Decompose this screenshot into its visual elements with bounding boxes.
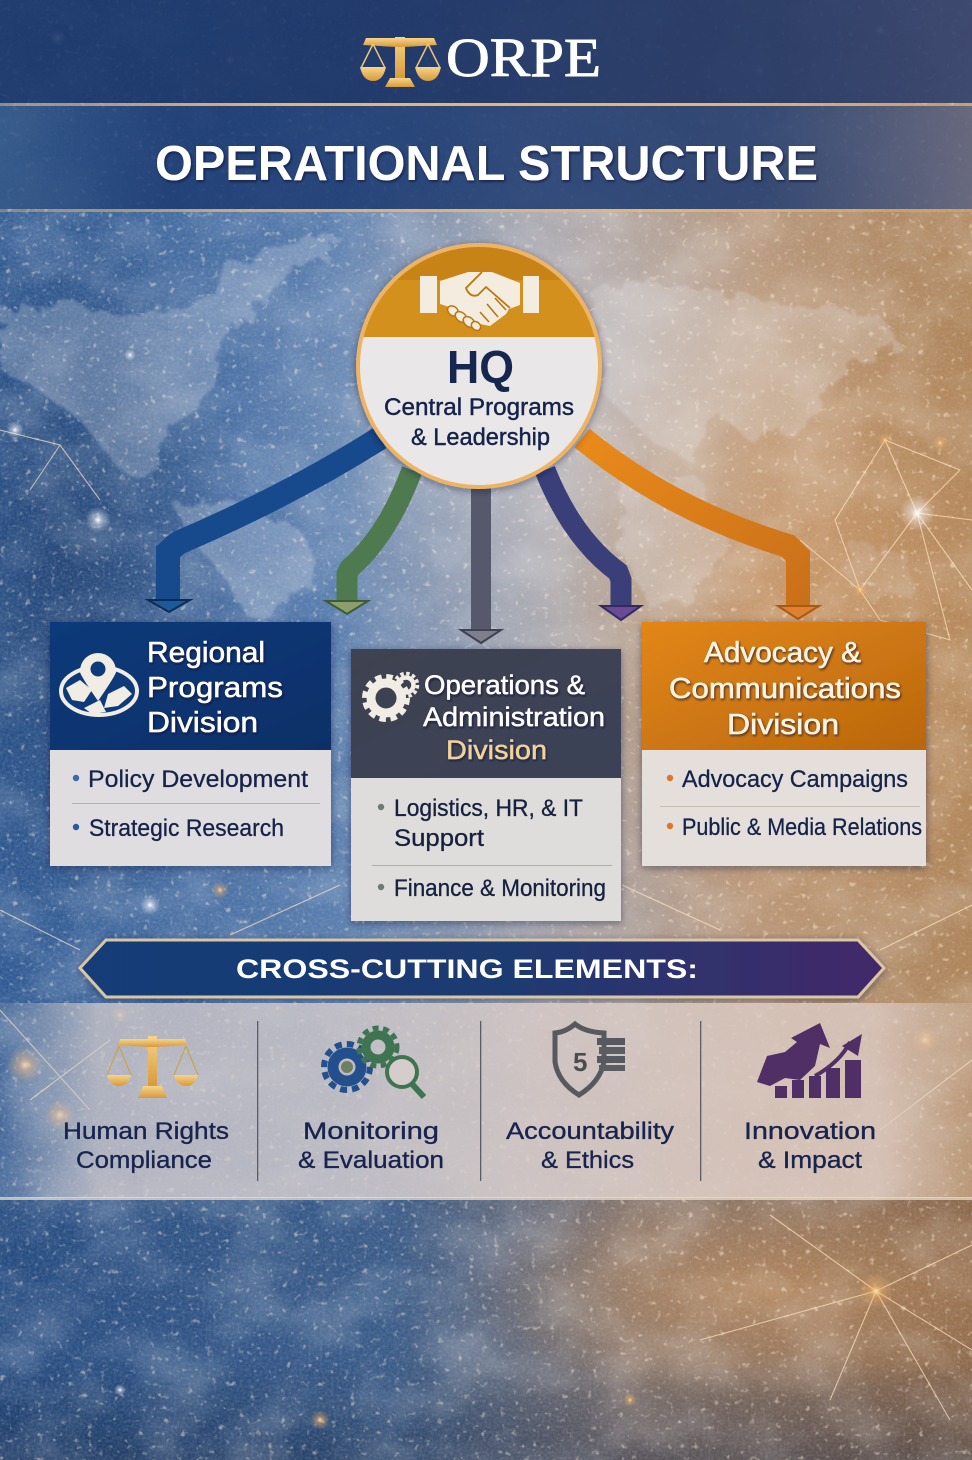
- list items: Public & Media Relations: [682, 814, 922, 841]
- item: Monitoring & Evaluation: [298, 1028, 444, 1174]
- heading: Operations &: [424, 670, 585, 700]
- HQ subtitle: [384, 394, 574, 451]
- panel: Advocacy & Communications Division: [642, 622, 926, 866]
- heading: Division: [147, 707, 258, 739]
- label: Accountability: [506, 1118, 674, 1145]
- icon: logo scales: [360, 37, 441, 87]
- icon: handshake: [420, 272, 539, 332]
- list items: [72, 766, 320, 842]
- icon: scales: [107, 1036, 198, 1098]
- title band: [0, 106, 972, 212]
- arrow: HQ to Operations: [461, 486, 501, 643]
- arrow: HQ to indigo branch: [545, 470, 641, 620]
- label: Monitoring: [303, 1118, 439, 1145]
- list items: [372, 795, 612, 902]
- label: [744, 1118, 876, 1174]
- panel: HQ circle: [350, 240, 610, 492]
- heading: [669, 637, 901, 741]
- icon: shield with 5: 5: [573, 1047, 587, 1077]
- icon: hand, arrow and rising bars: [757, 1023, 862, 1098]
- heading: Administration: [423, 702, 605, 732]
- label: & Impact: [758, 1147, 862, 1174]
- label: Compliance: [76, 1147, 212, 1174]
- list items: Advocacy Campaigns: [682, 766, 908, 793]
- label: & Ethics: [541, 1147, 634, 1174]
- list items: [660, 766, 922, 841]
- item: Accountability & Ethics: [506, 1024, 674, 1174]
- label: Human Rights: [63, 1118, 229, 1145]
- heading: Division: [446, 735, 547, 765]
- HQ subtitle: Central Programs: [384, 394, 574, 421]
- item: Innovation & Impact: [744, 1023, 876, 1174]
- arrow: HQ to Regional Programs: [148, 438, 380, 612]
- arrow: HQ to green branch: [326, 470, 412, 614]
- heading: Advocacy &: [704, 637, 861, 669]
- world map silhouettes: [0, 232, 915, 620]
- label: Innovation: [744, 1118, 876, 1145]
- label: [298, 1118, 444, 1174]
- heading: [147, 637, 283, 739]
- logo: scales and ORPE: [360, 27, 601, 88]
- list items: Policy Development: [88, 766, 308, 793]
- title: OPERATIONAL STRUCTURE: [155, 137, 818, 191]
- logo wordmark: ORPE: [446, 27, 601, 88]
- heading: [423, 670, 605, 765]
- label: [506, 1118, 674, 1174]
- list items: Support: [394, 825, 484, 852]
- HQ label: HQ: [447, 341, 514, 393]
- heading: Communications: [669, 673, 901, 705]
- top header band: [0, 0, 972, 106]
- banner heading: CROSS-CUTTING ELEMENTS:: [236, 954, 698, 984]
- icon: gears: [365, 674, 418, 719]
- panel: Regional Programs Division: [50, 622, 331, 866]
- heading: Regional: [147, 637, 265, 669]
- icon: shield with 5: [555, 1024, 625, 1095]
- banner: cross-cutting elements: [80, 940, 884, 997]
- label: [63, 1118, 229, 1174]
- HQ subtitle: & Leadership: [411, 424, 550, 451]
- heading: Programs: [147, 672, 283, 704]
- icon: globe with map pin: [61, 653, 137, 715]
- arrow: HQ to Advocacy: [582, 438, 819, 619]
- heading: Division: [727, 709, 839, 741]
- icon: gears and magnifier: [324, 1028, 424, 1097]
- label: & Evaluation: [298, 1147, 444, 1174]
- panel: Operations & Administration Division: [351, 649, 621, 921]
- item: Human Rights Compliance: [63, 1036, 229, 1174]
- list items: Logistics, HR, & IT: [394, 795, 583, 822]
- list items: Strategic Research: [89, 815, 284, 842]
- list items: Finance & Monitoring: [394, 875, 606, 902]
- panel: cross-cutting band: [0, 1003, 972, 1200]
